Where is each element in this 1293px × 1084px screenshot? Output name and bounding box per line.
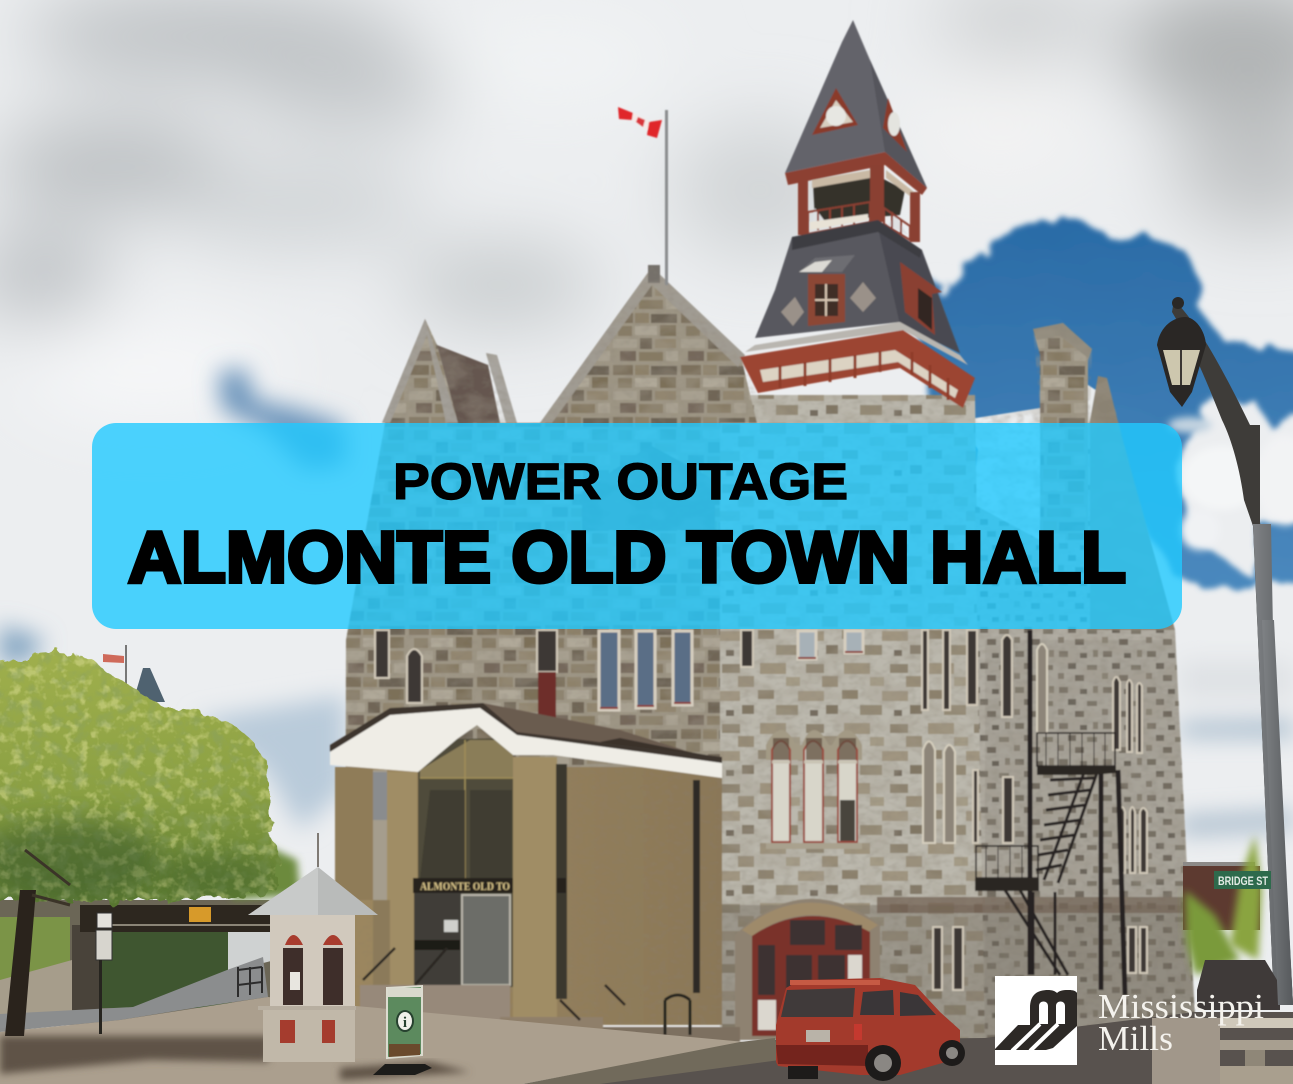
belfry posts	[798, 165, 920, 242]
chimney	[1033, 323, 1092, 540]
pavement	[0, 997, 745, 1084]
tower dormer front	[799, 255, 855, 272]
distant dome and flag	[103, 654, 124, 663]
belfry ceiling	[813, 172, 905, 222]
building: town hall	[330, 20, 1200, 1050]
sky: blue wisps left and low right	[0, 368, 1293, 834]
dark gable roof	[437, 345, 500, 423]
tree canopy	[0, 647, 282, 908]
logo wordmark: Mississippi	[1098, 987, 1264, 1026]
gable window inside banner	[582, 445, 715, 530]
asphalt and right foreground	[523, 620, 1293, 1084]
logo: mississippi mills: Mills	[1098, 1019, 1173, 1058]
triple arched windows	[766, 730, 862, 849]
main stone walls: right wing	[975, 420, 1195, 1040]
spire dormers	[812, 88, 858, 135]
canadian flag and pole	[618, 107, 668, 285]
fire escape	[976, 630, 1125, 995]
diamond slate details	[781, 282, 876, 326]
bicycle rack	[665, 995, 690, 1035]
entrance brick block	[335, 767, 722, 1025]
concrete bridge wall	[1152, 1018, 1220, 1084]
left gable	[382, 319, 458, 423]
main stone walls: central tower	[720, 395, 985, 1040]
entrance canopy	[330, 703, 722, 778]
white rear roof	[963, 385, 1105, 540]
belfry eaves	[785, 152, 927, 195]
door window red lower section	[538, 672, 556, 718]
fence	[238, 967, 262, 997]
bell tower	[740, 20, 975, 408]
red van	[776, 978, 965, 1081]
road	[0, 957, 268, 1032]
town hall sign	[413, 878, 566, 893]
parked car background	[1197, 960, 1280, 1010]
banner heading: power outage: POWER OUTAGE	[393, 453, 848, 510]
pillars	[387, 757, 557, 1017]
trees and street on left	[0, 630, 745, 1084]
big gable	[540, 267, 757, 423]
kiosk booth	[248, 833, 378, 1062]
stone strip between pillars	[373, 770, 387, 900]
info sign	[373, 986, 432, 1075]
red arched door	[735, 899, 880, 1040]
street sign: BRIDGE ST	[1218, 874, 1269, 888]
red cornice	[740, 330, 975, 408]
right background building and trees	[1183, 866, 1260, 930]
banner panel	[92, 423, 1182, 629]
right gable	[1090, 376, 1175, 630]
redraw pole foot	[1262, 620, 1293, 1005]
street light	[1157, 297, 1293, 1005]
sky: small clouds over blue	[1168, 417, 1293, 550]
sky: blue patch right	[925, 217, 1293, 582]
street sign	[1214, 871, 1271, 889]
lower wall shading	[722, 905, 1195, 1040]
drain pipe	[693, 780, 700, 993]
belfry railing	[808, 202, 910, 240]
stone wall mottling	[340, 260, 1200, 1050]
side arched windows	[923, 644, 1047, 843]
road signs	[97, 913, 112, 928]
glass doors	[414, 893, 462, 985]
entrance steps and walls	[360, 985, 510, 1030]
banner title: almonte old town hall: ALMONTE OLD TOWN HALL	[128, 518, 1126, 598]
logo: mississippi mills	[995, 976, 1264, 1065]
info sign: i	[403, 1015, 407, 1031]
glass strip	[556, 764, 567, 999]
rail bridge	[80, 905, 275, 932]
tower dormer side	[900, 262, 942, 335]
glass atrium	[418, 738, 513, 987]
lower roof	[755, 220, 960, 353]
icon: mills m mark	[995, 990, 1077, 1051]
spire	[785, 20, 927, 188]
blue glazed windows	[599, 631, 863, 710]
town hall sign: ALMONTE OLD TO	[420, 881, 510, 893]
red window sill lines	[600, 652, 863, 708]
main stone walls: left wing	[345, 423, 730, 1010]
background trees and retaining wall	[0, 900, 345, 1025]
upper row windows	[375, 630, 1147, 990]
tree trunk	[5, 890, 36, 1036]
